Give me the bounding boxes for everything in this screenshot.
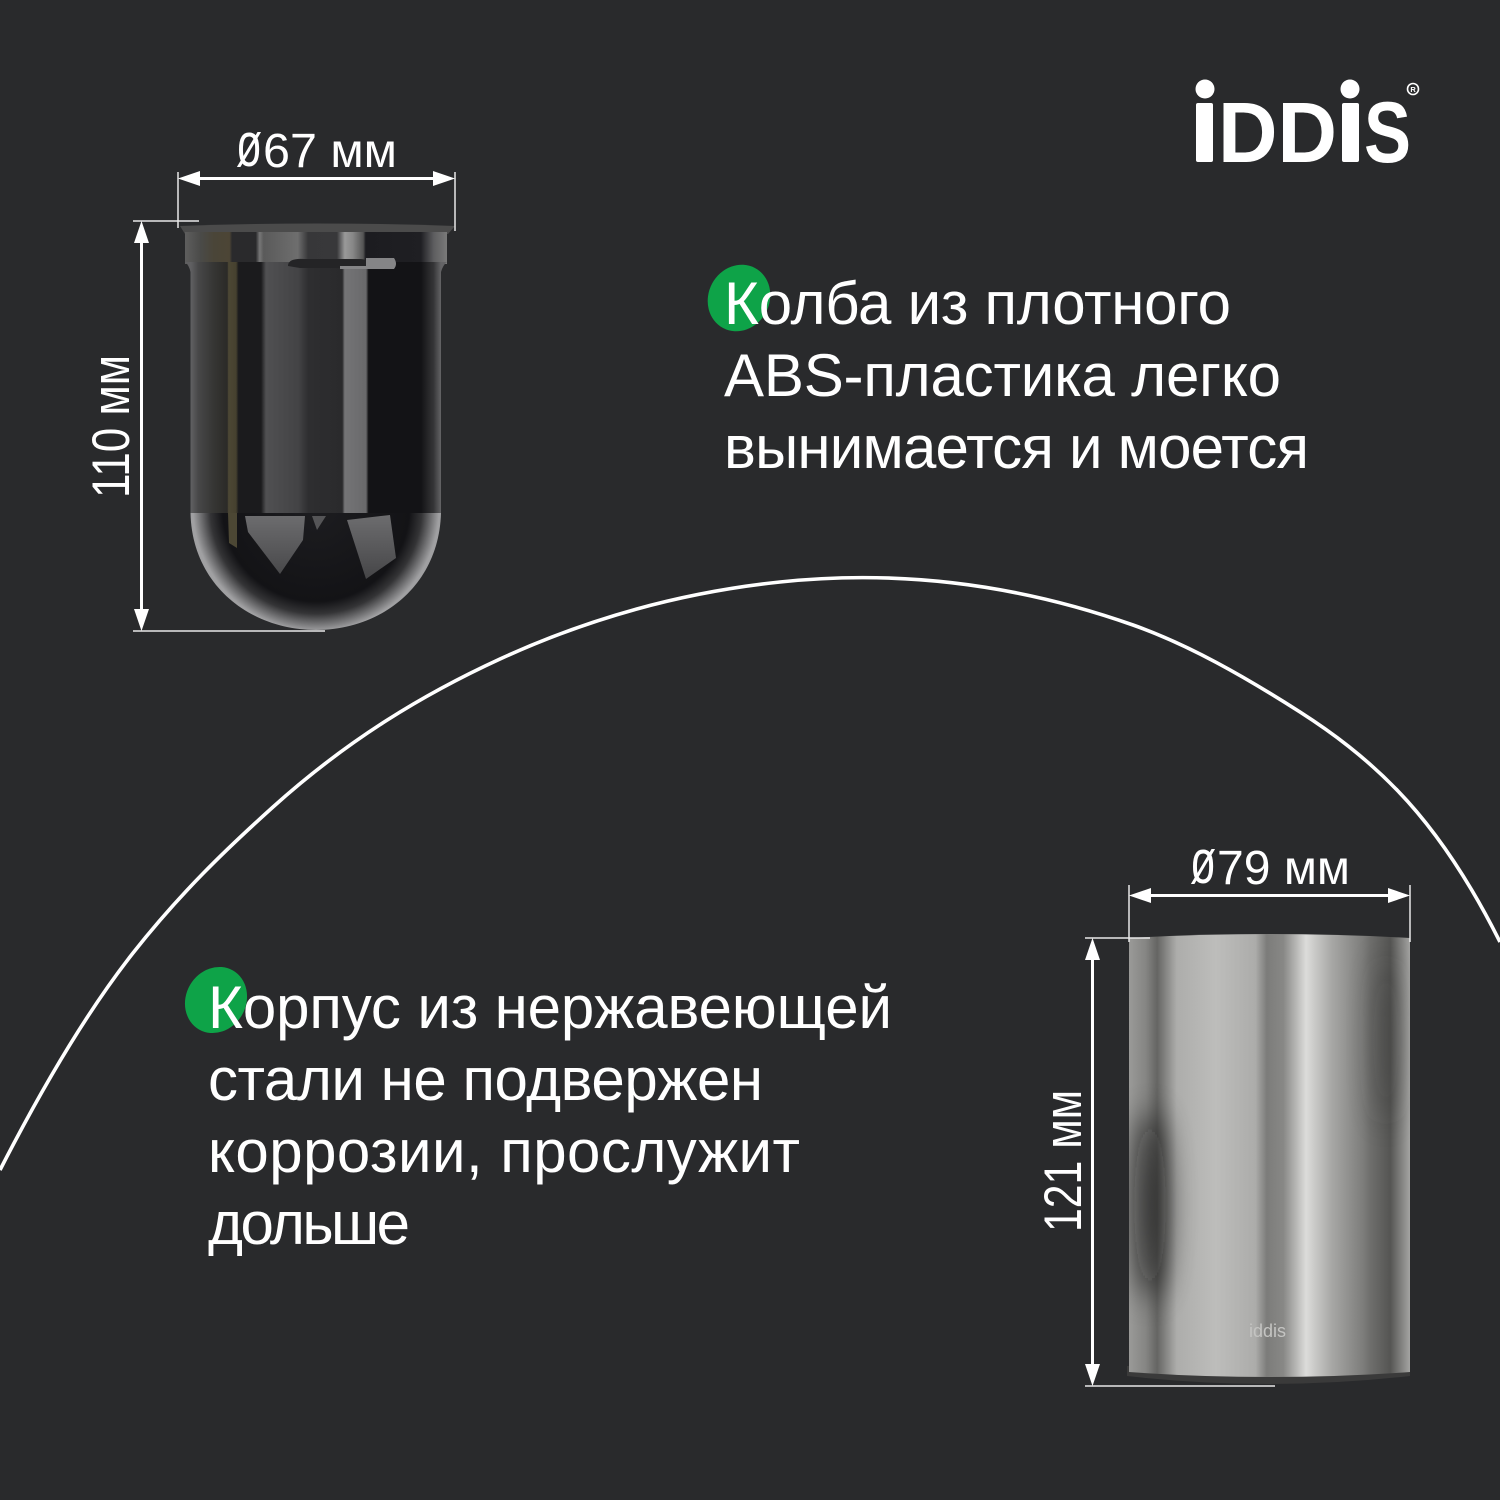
text block: body: дольше <box>208 1190 410 1257</box>
logo: IDDIS: DD <box>1218 86 1337 181</box>
cylinder shading <box>1134 955 1396 1300</box>
logo: IDDIS: R <box>1410 85 1416 94</box>
diameter sign: ø <box>1190 828 1216 897</box>
engraved logo: iddis <box>1249 1321 1286 1341</box>
text block: flask: ABS-пластика легко <box>724 342 1281 409</box>
reflection: centre <box>312 516 326 530</box>
cylinder illustration <box>1127 934 1410 1384</box>
logo: IDDIS <box>1196 80 1418 181</box>
text block: flask <box>696 254 1309 481</box>
reflection: chevron <box>245 516 305 574</box>
flask shoulder highlight <box>340 258 396 269</box>
flask illustration <box>180 224 455 630</box>
text block: body: Корпус из нержавеющей <box>208 974 892 1041</box>
logo: IDDIS: S <box>1364 85 1411 181</box>
label 121 mm: 121 мм <box>1034 1090 1093 1232</box>
dimension: cylinder diameter <box>1129 828 1410 942</box>
green dot <box>696 254 782 342</box>
label 110 mm: 110 мм <box>82 355 141 498</box>
flask rim <box>180 224 455 234</box>
flask body <box>185 262 447 513</box>
text block: flask: вынимается и моется <box>724 414 1309 481</box>
dimension: cylinder height <box>1034 938 1275 1386</box>
reflection: right <box>347 515 396 579</box>
green dot <box>173 956 259 1044</box>
flask collar <box>185 232 447 264</box>
diameter sign: ø <box>236 111 262 180</box>
text block: flask: Колба из плотного <box>724 270 1231 337</box>
dimension: flask height <box>82 221 325 631</box>
reflection: left strip <box>228 513 237 548</box>
text block: body <box>173 956 892 1257</box>
flask shoulder shadow <box>288 259 368 268</box>
cylinder bottom rim <box>1127 1366 1410 1384</box>
label 67 mm: 67 мм <box>263 125 397 178</box>
flask dome <box>190 513 441 630</box>
cylinder body <box>1129 934 1410 1377</box>
decorative arc <box>0 578 1500 1170</box>
text block: body: коррозии, прослужит <box>208 1118 800 1185</box>
dimension: flask diameter <box>178 111 455 231</box>
text block: body: стали не подвержен <box>208 1046 763 1113</box>
label 79 mm: 79 мм <box>1217 842 1350 895</box>
